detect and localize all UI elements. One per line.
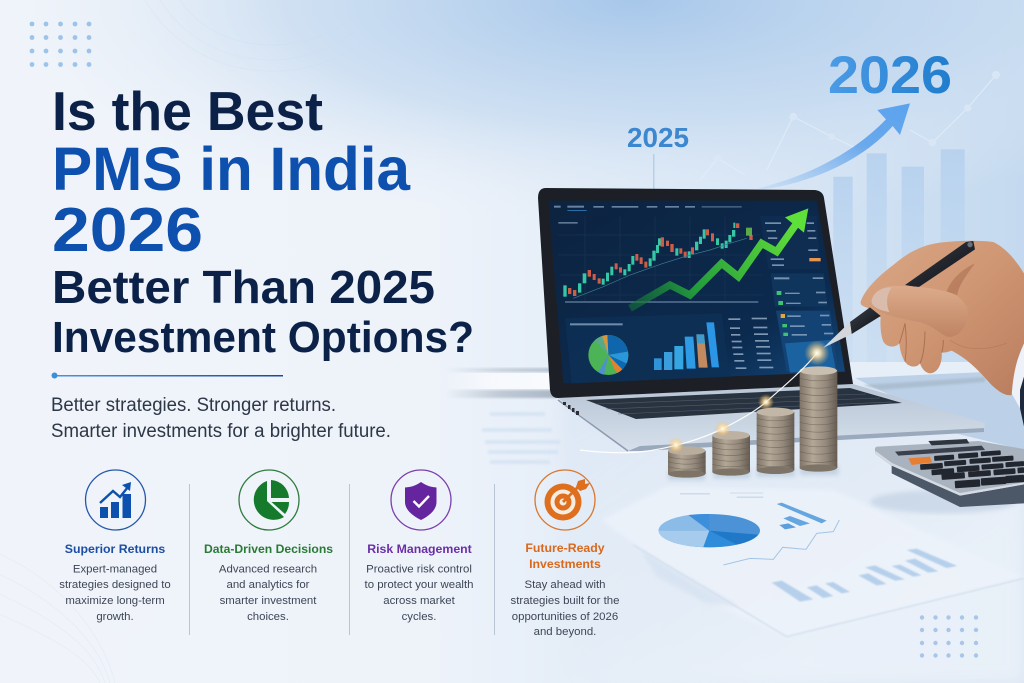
document on desk <box>602 487 1024 637</box>
stack shadows <box>668 465 838 480</box>
laptop ports <box>563 402 579 415</box>
body text: cycles. <box>402 611 436 623</box>
chart backdrop: faded bars and growth lines <box>653 71 1000 380</box>
decorative dot grid bottom right <box>920 615 978 658</box>
coin stack 2 <box>712 431 750 476</box>
coin stacks with glowing trend line <box>580 340 838 480</box>
body text: to protect your wealth <box>365 579 473 591</box>
2025 stem <box>652 154 655 189</box>
laptop <box>538 188 985 451</box>
coin stack 1 <box>668 446 706 478</box>
body text: and analytics for <box>227 579 310 591</box>
back of hand and fingers <box>861 241 1024 395</box>
pen <box>823 241 975 348</box>
bar chart <box>654 322 719 370</box>
thumb <box>872 286 968 337</box>
body text <box>511 579 619 638</box>
pie chart <box>588 335 628 375</box>
calculator top <box>875 441 1024 496</box>
body text: opportunities of 2026 <box>512 611 618 623</box>
calculator body side <box>875 453 1024 507</box>
heading: Investments <box>529 557 601 571</box>
body text: and beyond. <box>534 626 596 638</box>
body text: strategies designed to <box>59 579 171 591</box>
body text <box>219 564 317 623</box>
faded lines <box>700 71 1000 180</box>
body text <box>59 564 171 623</box>
desk surface <box>430 362 1024 683</box>
shirt cuff <box>1012 343 1024 427</box>
subtitle <box>51 395 391 442</box>
thumbnail <box>872 287 892 312</box>
title line 4: Better Than 2025 <box>52 261 435 313</box>
calculator keys <box>920 450 1024 488</box>
body text: strategies built for the <box>511 595 619 607</box>
icon: target with arrow <box>535 470 595 530</box>
bottom panel: pie and bars <box>565 313 773 383</box>
coin stack 4 <box>800 366 837 472</box>
blurred desk streaks <box>445 368 560 372</box>
decorative dot grid top left <box>30 22 91 67</box>
body text: growth. <box>96 611 134 623</box>
body text: Expert-managed <box>73 564 157 576</box>
panel: data-driven decisions <box>204 470 333 623</box>
body text: Stay ahead with <box>524 579 606 591</box>
title line 2: PMS in India <box>52 135 411 203</box>
body text: Proactive risk control <box>366 564 472 576</box>
body text: Advanced research <box>219 564 317 576</box>
icon: shield with check <box>391 470 451 530</box>
body text: smarter investment <box>220 595 317 607</box>
icon: rising bars <box>86 470 146 530</box>
document pie chart <box>659 514 760 547</box>
icon: pie chart <box>239 470 299 530</box>
year label 2026: 2026 <box>828 46 952 105</box>
faded bars <box>833 149 965 380</box>
orange key <box>908 457 932 465</box>
title line 1: Is the Best <box>52 80 323 142</box>
subtitle line 1: Better strategies. Stronger returns. <box>51 395 336 416</box>
glowing trend line <box>580 340 830 453</box>
calculator display <box>895 446 985 456</box>
finger shading <box>899 323 943 363</box>
body text: maximize long-term <box>65 595 165 607</box>
body text: across market <box>383 595 456 607</box>
hand holding pen <box>823 241 1024 427</box>
heading: Risk Management <box>367 542 472 556</box>
heading: Data-Driven Decisions <box>204 542 333 556</box>
title line 3: 2026 <box>52 196 203 265</box>
arrow: rising to 2026 <box>757 103 910 189</box>
green growth arrow <box>630 208 808 308</box>
screen dashboard <box>548 201 845 383</box>
right side data panels <box>760 216 838 373</box>
year label 2025: 2025 <box>627 122 689 153</box>
panel: risk management <box>365 470 473 623</box>
calculator <box>870 439 1024 513</box>
document bars and line <box>680 493 957 602</box>
calculator shadow <box>870 490 1017 513</box>
heading <box>525 541 605 571</box>
candlestick chart <box>558 217 763 303</box>
panel: superior returns <box>59 470 171 623</box>
body text <box>365 564 473 623</box>
subtitle line 2: Smarter investments for a brighter future. <box>51 421 391 442</box>
title line 5: Investment Options? <box>52 313 474 362</box>
title <box>52 80 474 362</box>
title rule with dot <box>52 372 283 378</box>
heading: Future-Ready <box>525 541 605 555</box>
menu bar <box>554 206 742 208</box>
laptop base <box>558 384 985 451</box>
coin stack 3 <box>757 408 794 474</box>
laptop lid <box>538 188 853 398</box>
keyboard <box>586 388 902 419</box>
data table <box>728 318 773 369</box>
heading: Superior Returns <box>65 542 165 556</box>
panel: future-ready investments <box>511 470 619 638</box>
column dividers <box>189 484 495 635</box>
body text: choices. <box>247 611 289 623</box>
